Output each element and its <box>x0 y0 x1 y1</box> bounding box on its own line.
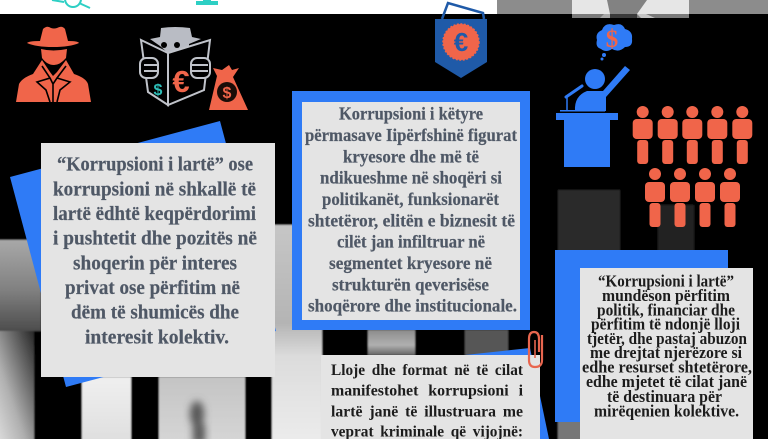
forms text: lartë janë të illustruara me <box>331 403 523 420</box>
icon: euro pennant <box>435 3 487 78</box>
definition text: dëm të shumicës dhe <box>71 303 239 324</box>
icon: figure hiding behind a newspaper: € <box>172 64 190 99</box>
icon: teal magnifier (cropped) <box>52 0 90 8</box>
definition text: lartë ëdhtë keqpërdorimi <box>53 204 257 225</box>
consequences text: mundëson përfitim <box>602 286 730 305</box>
definition text: privat ose përfitim në <box>65 278 240 299</box>
consequences text: me drejtat njerëzore si <box>590 343 742 362</box>
icon: money bag: $ <box>223 85 232 102</box>
involved figures text <box>305 103 517 316</box>
involved figures text: segmentet kryesore në <box>329 253 492 273</box>
consequences text: të destinuara për <box>607 387 722 406</box>
consequences text <box>582 272 752 420</box>
involved figures text: shoqërore dhe institucionale. <box>308 296 517 316</box>
icon: figure hiding behind a newspaper: $ <box>154 82 163 99</box>
panel: forms of corruption <box>321 348 549 439</box>
definition text: shoqerin për interes <box>73 253 237 274</box>
involved figures text: strukturën qeverisëse <box>332 274 489 294</box>
icon: figure hiding behind a newspaper <box>140 27 210 105</box>
forms text <box>331 362 524 439</box>
involved figures text: përmasave Iipërfshinë figurat <box>305 125 517 145</box>
icon: euro pennant: € <box>454 27 468 57</box>
top photo strip: suit and tie <box>497 0 768 18</box>
icon: thought cloud with dollar <box>596 24 632 61</box>
definition text <box>53 155 257 348</box>
icon: speaker at podium <box>556 66 630 167</box>
definition text: “Korrupsioni i lartë” ose <box>57 155 253 176</box>
icon: audience of people <box>633 106 752 227</box>
consequences text: tjetër, dhe pastaj abuzon <box>587 329 747 348</box>
consequences text: edhe resurset shtetërore, <box>582 358 752 376</box>
top white band <box>0 0 497 14</box>
involved figures text: Korrupsioni i këtyre <box>339 103 483 123</box>
forms text: manifestohet korrupsioni i <box>331 383 524 400</box>
definition text: korrupsioni në shkallë të <box>53 179 256 200</box>
consequences text: edhe mjetet të cilat janë <box>586 372 747 391</box>
involved figures text: politikanët, funksionarët <box>322 189 499 209</box>
consequences text: mirëqenien kolektive. <box>594 402 739 420</box>
icon: paperclip <box>529 332 542 367</box>
panel: consequences <box>555 250 753 439</box>
consequences text: politik, financiar dhe <box>597 300 735 319</box>
forms text: Lloje dhe format në të cilat <box>331 362 524 379</box>
icon: spy in hat and coat <box>16 27 91 102</box>
panel: who is involved <box>292 91 530 330</box>
involved figures text: ndikueshme në shoqëri si <box>320 168 502 188</box>
definition text: interesit kolektiv. <box>85 327 229 348</box>
involved figures text: kryesore dhe më të <box>343 146 479 166</box>
involved figures text: cilët jan infiltruar në <box>337 232 485 252</box>
blurred figure in background <box>190 401 205 439</box>
definition text: i pushtetit dhe pozitës në <box>53 229 257 250</box>
icon: teal stand (cropped) <box>196 0 218 5</box>
consequences text: “Korrupsioni i lartë” <box>598 272 734 291</box>
panel: definition of high-level corruption <box>10 121 276 387</box>
involved figures text: shtetëror, elitën e biznesit të <box>308 210 515 230</box>
icon: money bag <box>209 65 248 110</box>
icon: thought cloud with dollar: $ <box>606 26 618 53</box>
consequences text: përfitim të ndonjë lloji <box>591 315 740 334</box>
